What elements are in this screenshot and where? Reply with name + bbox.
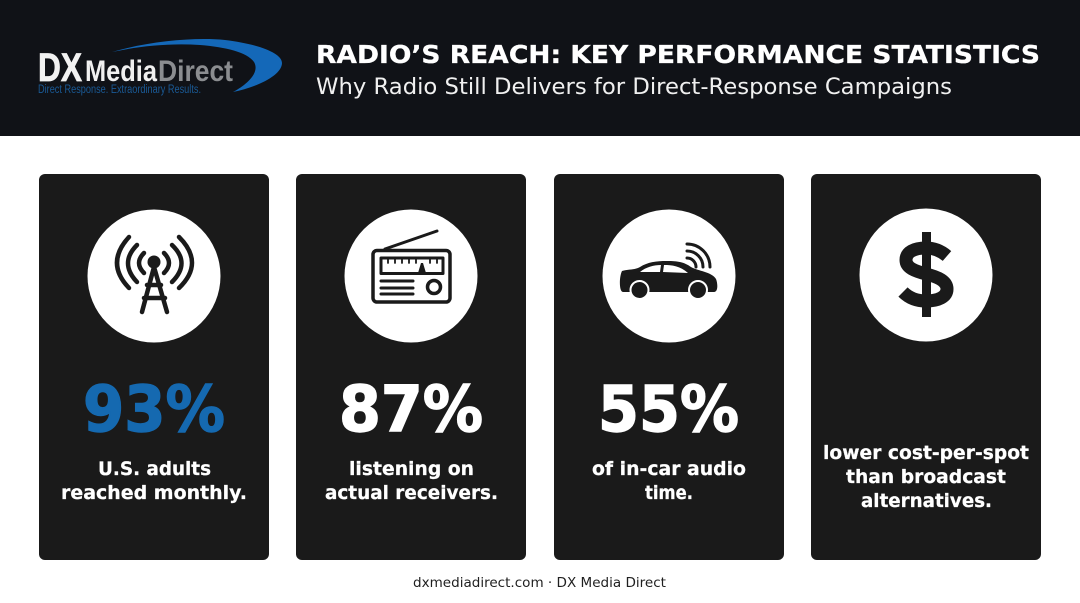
icon: radio tower (88, 210, 220, 342)
panel: lower cost-per-spot (811, 174, 1041, 560)
stat: 93%: 93% (83, 373, 225, 446)
label: listening on actual receivers (325, 458, 498, 504)
logo tagline: Direct Response. Extraordinary Results. (38, 84, 201, 96)
label: listening on actual receivers: listening on (349, 458, 474, 480)
label: U.S. adults reached monthly: reached monthly. (61, 482, 247, 504)
logo wordmark: Media (85, 55, 157, 88)
label: lower cost-per-spot than broadcast alternatives (823, 442, 1029, 512)
stat: 55%: 55% (598, 373, 739, 446)
logo wordmark: Direct (158, 55, 233, 88)
label: lower cost-per-spot than broadcast alternatives: alternatives. (861, 490, 992, 512)
label: U.S. adults reached monthly: U.S. adults (98, 458, 211, 480)
stat: 87%: 87% (339, 373, 483, 446)
panel: 93% adults reached (39, 174, 269, 560)
label: lower cost-per-spot than broadcast alternatives: than broadcast (846, 466, 1006, 488)
label: of in-car audio time: of in-car audio (592, 458, 746, 480)
label: U.S. adults reached monthly (61, 458, 247, 504)
label: of in-car audio time (592, 458, 746, 504)
icon: dollar sign (860, 208, 992, 342)
label: lower cost-per-spot than broadcast alternatives: lower cost-per-spot (823, 442, 1029, 464)
subtitle: Why Radio Still Delivers for Direct-Response Campaigns (316, 75, 952, 100)
header band (0, 0, 1080, 136)
logo swoosh (112, 39, 282, 92)
footer: dxmediadirect.com · DX Media Direct (413, 575, 666, 591)
icon: radio receiver (344, 210, 478, 342)
title: RADIO’S REACH: KEY PERFORMANCE STATISTICS (316, 40, 1040, 69)
panel: 87% actual receivers (296, 174, 526, 560)
label: of in-car audio time: time. (645, 482, 693, 504)
logo wordmark: DX (38, 46, 82, 90)
logo wordmark (38, 46, 233, 90)
panel: 55% in-car audio (554, 174, 784, 560)
logo (38, 39, 282, 96)
icon: car with signal (602, 210, 736, 342)
label: listening on actual receivers: actual receivers. (325, 482, 498, 504)
